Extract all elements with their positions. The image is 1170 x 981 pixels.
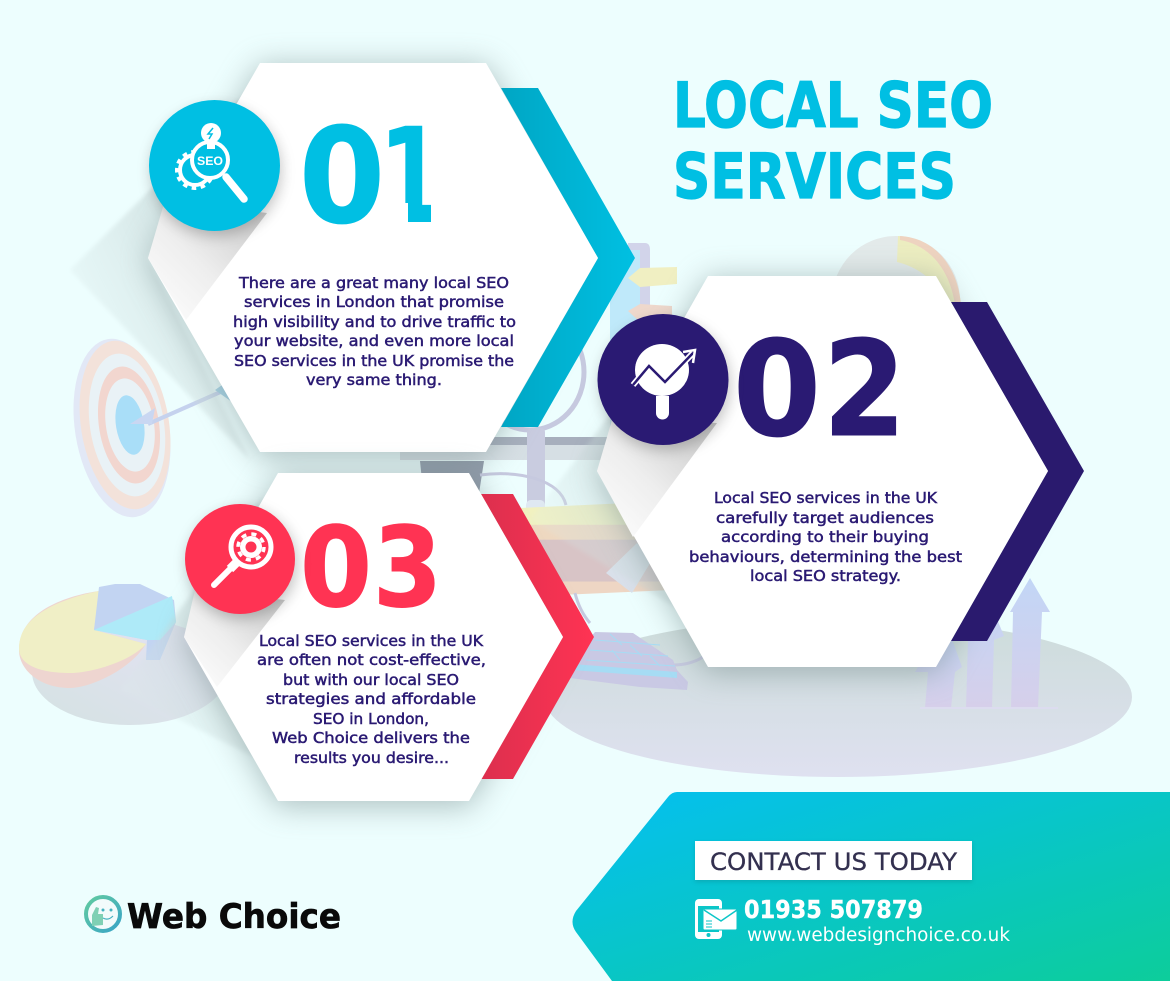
card 2 number: 0	[733, 313, 821, 467]
card 2 hexagon	[597, 276, 1048, 667]
illustration: monitor	[400, 243, 677, 500]
logo: Web Choice	[86, 897, 341, 937]
contact button	[695, 841, 972, 882]
wordmark: Web Choice	[127, 897, 341, 937]
card 1 text: services in London that promise	[244, 293, 504, 311]
icon: gear magnifier badge	[185, 504, 297, 619]
card 2 text	[689, 489, 962, 585]
card 3 text	[257, 632, 486, 767]
illustration: faded background artwork	[19, 236, 1132, 777]
long shadows behind hexagons	[70, 95, 690, 760]
icon: chart magnifier badge	[598, 314, 730, 450]
card 1 soft shadow	[148, 65, 598, 458]
card 3 number	[300, 504, 442, 633]
card 3 circle shadow	[184, 590, 285, 687]
contact button: CONTACT US TODAY	[710, 848, 957, 876]
icon: thumbs-up smiley	[86, 897, 120, 931]
card 2 text: according to their buying	[721, 528, 929, 546]
card 2 circle shadow	[597, 420, 717, 537]
card 1 text: SEO services in the UK promise the	[234, 352, 514, 370]
title	[673, 69, 993, 213]
illustration: keyboard	[570, 632, 688, 690]
panel: card 1	[148, 63, 635, 458]
card 1 hexagon	[148, 63, 598, 452]
card 2 text: Local SEO services in the UK	[714, 489, 938, 507]
website: www.webdesignchoice.co.uk	[747, 925, 1010, 946]
icon: SEO magnifier badge	[149, 100, 281, 236]
panel: card 3	[184, 473, 594, 807]
illustration: donut chart behind card 2	[832, 236, 961, 305]
card 1 text	[233, 274, 516, 389]
card 3 text: SEO in London,	[313, 710, 429, 728]
illustration: desk and stand	[520, 502, 703, 665]
illustration: growth arrows	[915, 578, 1058, 709]
card 2 text: carefully target audiences	[716, 509, 934, 527]
card 1 number: 1	[378, 100, 444, 254]
card 3 text: Web Choice delivers the	[272, 729, 470, 747]
card 3 text: are often not cost-effective,	[257, 651, 486, 669]
contact background	[572, 792, 1170, 981]
card 3 text: Local SEO services in the UK	[259, 632, 484, 650]
card 1 text: very same thing.	[306, 371, 442, 389]
card 1 text: your website, and even more local	[234, 332, 514, 350]
card 3 number: 0	[300, 504, 372, 633]
title: SERVICES	[673, 140, 956, 213]
illustration: magnifying glass	[476, 314, 584, 514]
card 2 text: behaviours, determining the best	[689, 548, 962, 566]
phone number: 01935 507879	[744, 895, 923, 924]
card 3 text: strategies and affordable	[266, 690, 476, 708]
card 2 number	[733, 313, 906, 467]
icon: phone and envelope	[695, 899, 737, 939]
card 1 text: There are a great many local SEO	[238, 274, 509, 292]
illustration: target with arrow	[61, 332, 232, 524]
card 3 text: results you desire...	[294, 749, 449, 767]
illustration: ground ellipse	[544, 617, 1132, 777]
panel: contact	[572, 792, 1170, 981]
card 1 text: high visibility and to drive traffic to	[233, 313, 516, 331]
card 3 soft shadow	[184, 475, 563, 807]
card 2 text: local SEO strategy.	[750, 567, 901, 585]
card 1 circle shadow	[148, 200, 267, 320]
title: LOCAL SEO	[673, 69, 993, 142]
card 1 number: 0	[299, 100, 385, 254]
card 2 chevron	[951, 302, 1084, 641]
card 2 number: 2	[823, 313, 906, 467]
panel: card 2	[597, 276, 1084, 673]
card 1 number	[299, 100, 457, 254]
card 3 chevron	[481, 494, 594, 779]
icon: SEO magnifier badge: SEO	[197, 154, 223, 168]
card 1 chevron	[501, 88, 635, 427]
card 2 soft shadow	[597, 278, 1048, 673]
card 3 number: 3	[373, 504, 442, 633]
illustration: pie chart	[19, 584, 228, 725]
card 3 text: but with our local SEO	[283, 671, 459, 689]
card 3 hexagon	[184, 473, 563, 801]
